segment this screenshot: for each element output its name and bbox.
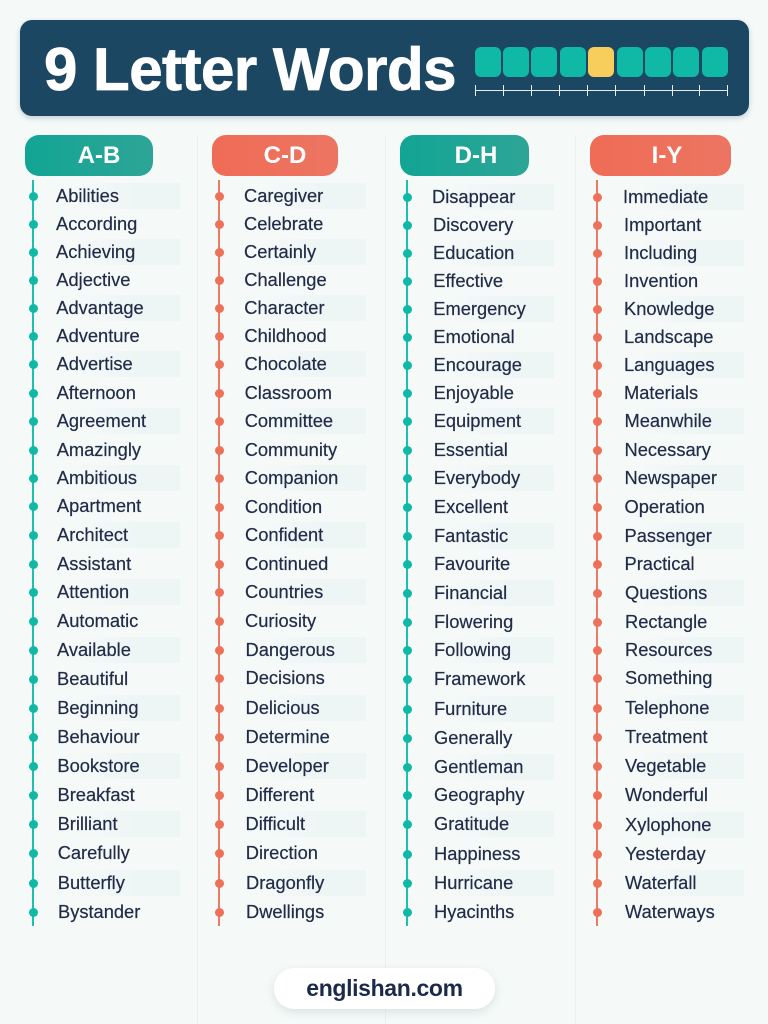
word list: A-B: Agreement: [57, 410, 146, 431]
word list: C-D: Dangerous: [246, 639, 335, 660]
word list: C-D: Curiosity: [245, 610, 316, 631]
word list: I-Y: Yesterday: [625, 843, 706, 864]
word list: C-D: Dragonfly: [246, 872, 324, 893]
word list: A-B: Amazingly: [57, 439, 141, 460]
title banner: [20, 20, 749, 116]
word list: C-D: Direction: [246, 842, 318, 863]
word list: D-H: Encourage: [434, 354, 522, 375]
word list: C-D: Difficult: [246, 813, 305, 834]
word list: C-D: Continued: [245, 553, 328, 574]
word list: D-H: Generally: [434, 727, 512, 748]
word list: A-B: Automatic: [57, 610, 138, 631]
heading: A-B: A-B: [78, 142, 120, 169]
heading: C-D: C-D: [264, 142, 306, 169]
word list: A-B: Bystander: [58, 901, 140, 922]
word list: I-Y: Important: [624, 214, 701, 235]
word list: I-Y: Operation: [624, 496, 705, 517]
word list: D-H: Fantastic: [434, 525, 508, 546]
word list: D-H: Furniture: [434, 698, 507, 719]
word list: C-D: Companion: [245, 467, 338, 488]
word list: D-H: Education: [433, 242, 514, 263]
word list: I-Y: Practical: [624, 553, 695, 574]
word list: A-B: Butterfly: [58, 872, 125, 893]
word list: C-D: Classroom: [245, 382, 332, 403]
word list: I-Y: Newspaper: [624, 467, 717, 488]
word list: I-Y: Xylophone: [625, 814, 711, 835]
word list: C-D: Childhood: [244, 325, 327, 346]
word list: C-D: Character: [244, 297, 325, 318]
word list: A-B: Adventure: [56, 325, 140, 346]
word list: I-Y: Languages: [624, 354, 714, 375]
word list: D-H: Enjoyable: [434, 382, 514, 403]
heading: D-H: [400, 135, 529, 176]
word list: A-B: Beautiful: [57, 668, 128, 689]
word list: C-D: Developer: [246, 755, 329, 776]
word list: C-D: Celebrate: [244, 213, 323, 234]
word list: A-B: According: [56, 213, 137, 234]
word list: D-H: Effective: [433, 270, 503, 291]
word list: I-Y: Passenger: [624, 525, 712, 546]
word list: C-D: Certainly: [244, 241, 316, 262]
word list: D-H: Gentleman: [434, 756, 523, 777]
word list: C-D: Condition: [245, 496, 322, 517]
word list: I-Y: Knowledge: [624, 298, 714, 319]
word list: I-Y: Vegetable: [625, 755, 706, 776]
word list: A-B: Assistant: [57, 553, 131, 574]
word list: C-D: Different: [246, 784, 314, 805]
icon: nine letter tiles: [475, 47, 728, 77]
word list: I-Y: Wonderful: [625, 784, 708, 805]
word list: C-D: [215, 180, 338, 926]
word list: C-D: Caregiver: [244, 185, 323, 206]
word list: C-D: Community: [245, 439, 337, 460]
word list: A-B: Carefully: [58, 842, 130, 863]
heading: C-D: [212, 135, 338, 176]
word list: I-Y: Waterfall: [625, 872, 696, 893]
word list: I-Y: Resources: [625, 639, 712, 660]
word list: C-D: Chocolate: [244, 353, 327, 374]
word list: A-B: Advantage: [56, 297, 144, 318]
heading: A-B: [25, 135, 153, 176]
footer website pill: [274, 968, 495, 1009]
word list: D-H: Hurricane: [434, 872, 513, 893]
word list: D-H: Everybody: [434, 467, 520, 488]
word list: A-B: Breakfast: [58, 784, 135, 805]
word list: A-B: Afternoon: [57, 382, 136, 403]
word list: D-H: Emotional: [433, 326, 515, 347]
word list: A-B: Abilities: [56, 185, 119, 206]
word list: C-D: Decisions: [246, 667, 325, 688]
word list: I-Y: Treatment: [625, 726, 708, 747]
word list: I-Y: Meanwhile: [624, 410, 712, 431]
word list: D-H: Equipment: [434, 410, 521, 431]
word list: C-D: Determine: [246, 726, 330, 747]
word list: I-Y: Something: [625, 667, 712, 688]
word list: A-B: [29, 180, 146, 926]
word list: I-Y: Necessary: [624, 439, 711, 460]
word list: I-Y: [593, 180, 717, 926]
word list: C-D: Confident: [245, 524, 323, 545]
word list: D-H: Flowering: [434, 611, 513, 632]
word list: I-Y: Landscape: [624, 326, 713, 347]
word list: A-B: Ambitious: [57, 467, 137, 488]
word list: D-H: Gratitude: [434, 813, 509, 834]
title: 9 Letter Words: [44, 36, 456, 103]
word list: I-Y: Telephone: [625, 697, 709, 718]
heading: I-Y: I-Y: [652, 142, 682, 169]
word list: A-B: Available: [57, 639, 131, 660]
word list: D-H: [403, 180, 526, 926]
word list: I-Y: Immediate: [623, 186, 708, 207]
word list: C-D: Delicious: [246, 697, 320, 718]
word list: D-H: Excellent: [434, 496, 508, 517]
word list: A-B: Bookstore: [57, 755, 140, 776]
heading: I-Y: [590, 135, 731, 176]
word list: I-Y: Including: [624, 242, 697, 263]
word list: I-Y: Waterways: [625, 901, 715, 922]
word list: C-D: Committee: [245, 410, 333, 431]
word list: D-H: Framework: [434, 668, 525, 689]
word list: D-H: Discovery: [433, 214, 513, 235]
word list: I-Y: Invention: [624, 270, 698, 291]
word list: A-B: Attention: [57, 581, 129, 602]
word list: D-H: Favourite: [434, 553, 510, 574]
word list: C-D: Dwellings: [246, 901, 324, 922]
word list: A-B: Achieving: [56, 241, 135, 262]
heading: D-H: D-H: [455, 142, 497, 169]
word list: D-H: Essential: [434, 439, 508, 460]
word list: D-H: Disappear: [432, 186, 515, 207]
word list: D-H: Financial: [434, 582, 507, 603]
word list: A-B: Behaviour: [57, 726, 140, 747]
word list: I-Y: Questions: [625, 582, 707, 603]
word list: D-H: Following: [434, 639, 511, 660]
word list: C-D: Countries: [245, 581, 323, 602]
word list: D-H: Happiness: [434, 843, 520, 864]
word list: I-Y: Rectangle: [625, 611, 707, 632]
word list: A-B: Advertise: [56, 353, 133, 374]
word list: A-B: Apartment: [57, 495, 141, 516]
word list: C-D: Challenge: [244, 269, 327, 290]
word list: A-B: Adjective: [56, 269, 130, 290]
word list: A-B: Beginning: [57, 697, 139, 718]
word list: A-B: Architect: [57, 524, 128, 545]
word list: A-B: Brilliant: [58, 813, 118, 834]
word list: D-H: Geography: [434, 784, 524, 805]
icon: ruler under tiles: [475, 85, 728, 96]
word list: I-Y: Materials: [624, 382, 698, 403]
footer website pill: englishan.com: [306, 975, 463, 1001]
word list: D-H: Emergency: [433, 298, 526, 319]
word list: D-H: Hyacinths: [434, 901, 514, 922]
